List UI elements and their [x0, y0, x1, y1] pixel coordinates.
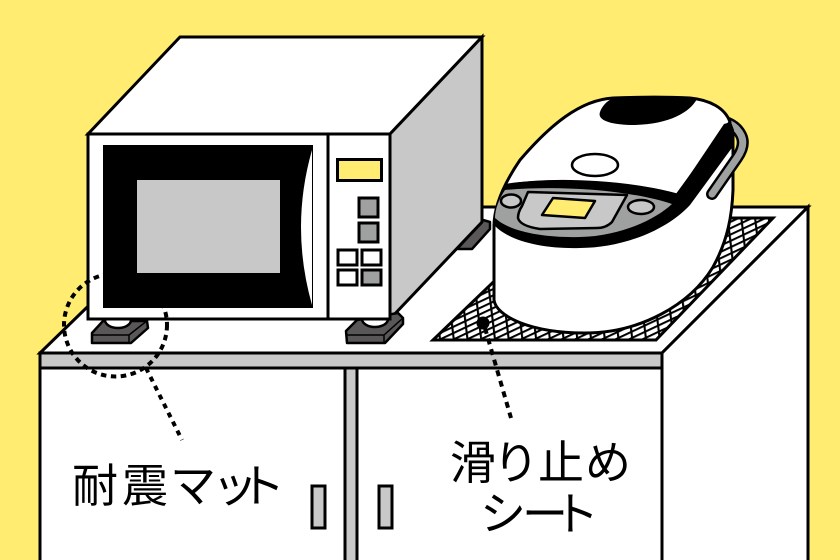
cabinet [40, 207, 808, 560]
centre door gap [345, 368, 357, 560]
cabinet top surface [40, 207, 808, 353]
control panel [495, 188, 672, 237]
lid black band [494, 122, 734, 248]
label: anti-slip sheet: 滑り止め [450, 437, 631, 489]
cooker lid [494, 97, 730, 226]
control panel inset [518, 192, 627, 229]
left cabinet door [40, 368, 345, 560]
right button [628, 200, 654, 214]
microwave window [137, 180, 280, 273]
callout: sheet pointer [476, 316, 511, 418]
cabinet front edge band [40, 353, 662, 368]
cooker body [494, 135, 733, 333]
microwave front [88, 134, 390, 319]
microwave top [88, 37, 482, 134]
cooker handle [712, 123, 743, 194]
microwave oven [88, 37, 482, 343]
cabinet right side [662, 207, 808, 560]
front right mat [346, 311, 403, 343]
cooker display [542, 198, 595, 218]
back right mat [458, 220, 490, 249]
label: seismic mat: 耐震マット [72, 460, 285, 512]
callout: mat circle [64, 274, 182, 440]
control panel display [338, 160, 382, 180]
anti-slip sheet [433, 218, 773, 340]
door handle highlight [301, 150, 312, 305]
label: anti-slip sheet: シート [480, 488, 599, 540]
front left mat [92, 312, 148, 343]
label: anti-slip sheet [450, 437, 631, 540]
right cabinet door [357, 368, 662, 560]
left button [501, 194, 521, 208]
microwave window frame [103, 145, 313, 308]
control panel buttons [338, 198, 381, 285]
microwave side [390, 37, 482, 319]
lid button [572, 154, 618, 176]
right door handle [379, 486, 392, 528]
rice cooker [494, 97, 743, 333]
door/panel divider [326, 134, 330, 319]
lid black cap [600, 97, 697, 125]
left door handle [312, 486, 325, 528]
